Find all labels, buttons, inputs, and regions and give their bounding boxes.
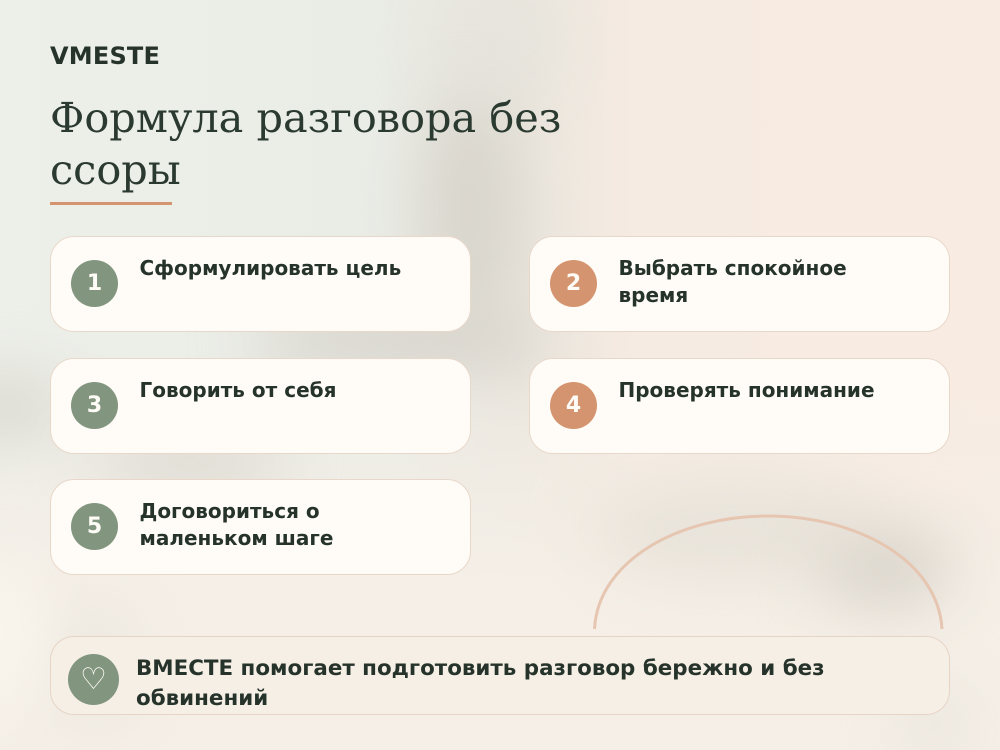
card 2: время xyxy=(618,282,688,306)
card 5 xyxy=(50,478,471,574)
card 4: 4 xyxy=(566,392,581,418)
card 4 xyxy=(529,358,950,454)
title: ссоры xyxy=(50,146,181,194)
card 2: Выбрать спокойное xyxy=(618,256,847,280)
card 5: Договориться о xyxy=(140,498,320,522)
card 5: 5 xyxy=(87,514,102,538)
card 3 xyxy=(50,358,471,454)
title xyxy=(50,94,561,194)
title: Формула разговора без xyxy=(50,94,561,142)
title underline xyxy=(50,202,172,205)
card 1 xyxy=(50,236,471,332)
brand name: VMESTE xyxy=(50,42,160,70)
icon: heart xyxy=(68,654,119,705)
callout text: обвинений xyxy=(136,686,268,710)
card 1: Сформулировать цель xyxy=(140,256,401,280)
card 1: 1 xyxy=(87,270,102,296)
card 3: Говорить от себя xyxy=(140,378,336,402)
bottom callout xyxy=(50,636,950,715)
card 3: 3 xyxy=(87,392,102,418)
callout text: ВМЕСТЕ помогает подготовить разговор бережно и без xyxy=(136,656,825,680)
decorative arc xyxy=(593,514,944,630)
icon: heart: ♡ xyxy=(80,662,107,697)
card 2 xyxy=(529,236,950,332)
card 4: Проверять понимание xyxy=(618,378,875,402)
card 2: 2 xyxy=(566,270,581,296)
callout text xyxy=(136,656,825,710)
card 5: маленьком шаге xyxy=(140,526,333,550)
